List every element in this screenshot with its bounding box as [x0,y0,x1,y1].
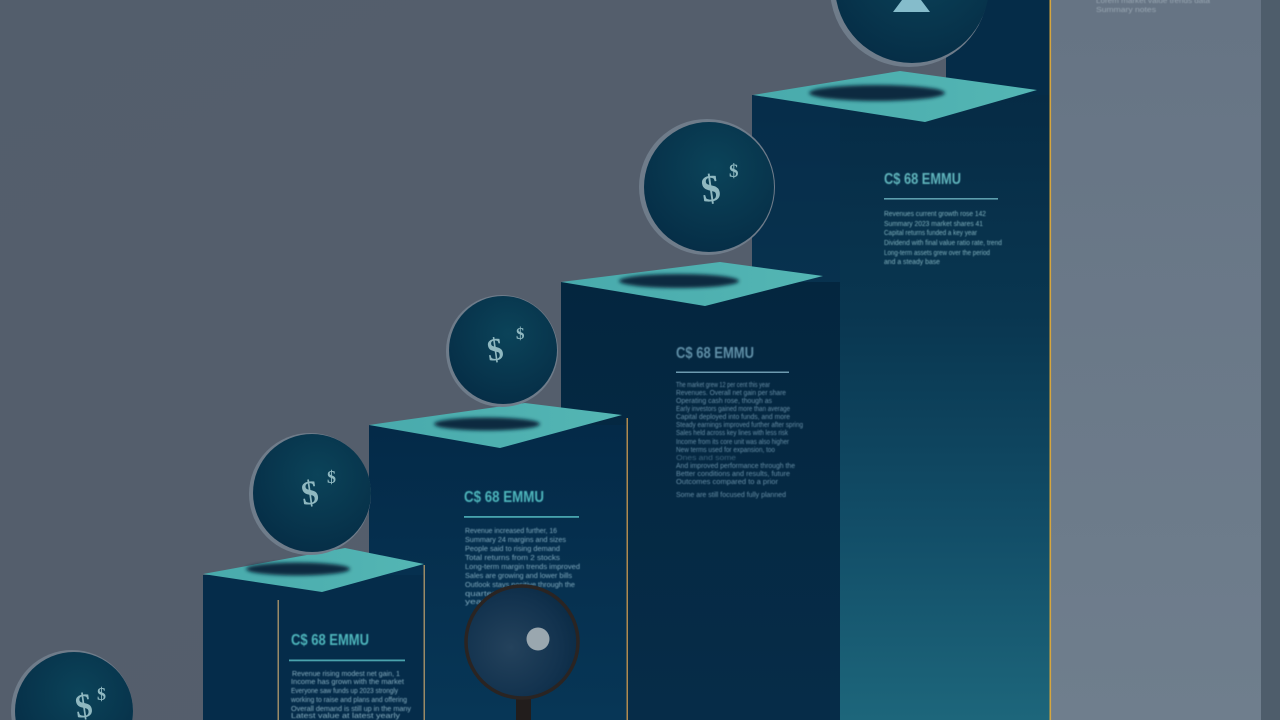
column 1 body text: Everyone saw funds up 2023 strongly [291,688,398,695]
column 4 body text: Summary 2023 market shares 41 [884,221,983,228]
column 4 body text: Capital returns funded a key year [884,230,978,237]
column 2 body text: Sales are growing and lower bills [465,573,573,580]
column 3 body text: Outcomes compared to a prior [676,479,779,486]
icon: dollar signs [299,467,336,513]
column 1 heading: C$ 68 EMMU [291,632,369,649]
icon: dollar signs [485,324,525,368]
icon: dollar signs [698,161,738,211]
column 1 body text: working to raise and plans and offering [290,697,407,704]
column 3 top shadow [619,274,739,288]
column 2 body text: Summary 24 margins and sizes [465,537,567,544]
column 1 body text: Income has grown with the market [291,679,404,686]
text: side panel caption [1096,0,1210,14]
column 3 body text [676,382,803,499]
column 3 body text: Early investors gained more than average [676,406,790,413]
column 2 body text: year [465,599,486,606]
column 4 top face [753,71,1037,122]
column 3 body text: Sales held across key lines with less risk [676,430,788,437]
column 3 body text: And improved performance through the [676,463,795,470]
column 2 body text: Long-term margin trends improved [465,564,580,571]
column 1 body text: Overall demand is still up in the many [291,706,412,713]
icon: magnifying glass [466,586,578,720]
icon: dollar signs: $ [485,330,506,368]
column 3 body text: The market grew 12 per cent this year [676,382,771,389]
coin 4 [639,119,775,255]
coin 3 [446,295,558,407]
column 3 [561,262,840,720]
coin 1 [11,650,133,720]
column 4 body text: Long-term assets grew over the period [884,250,990,257]
column 3 body text: Operating cash rose, though as [676,398,772,405]
column 3 body text: Better conditions and results, future [676,471,790,478]
column 4 body text: Dividend with final value ratio rate, trend [884,240,1002,247]
icon: dollar signs: $ [327,467,336,487]
column 4 body text: Revenues current growth rose 142 [884,211,986,218]
column 4 body text [884,211,1002,266]
column 3 body text: New terms used for expansion, too [676,447,775,454]
column 3 body text: Some are still focused fully planned [676,492,786,499]
column 4 [752,0,1051,720]
column 3 body text: Income from its core unit was also higher [676,439,790,446]
column 1 top shadow [246,562,350,576]
column 4 heading: C$ 68 EMMU [884,171,961,188]
column 1 [203,548,425,720]
icon: dollar signs: $ [299,474,321,513]
text: side panel caption: Summary notes [1096,7,1157,14]
icon: dollar signs: $ [97,684,106,704]
column 3 top face [561,262,823,306]
panel: right side panel [1051,0,1280,720]
column 1 body text: Latest value at latest yearly [291,713,401,720]
coin 2 [249,433,371,555]
column 2 top shadow [434,418,540,430]
column 2 heading: C$ 68 EMMU [464,489,544,506]
column 3 body text: Capital deployed into funds, and more [676,414,790,421]
column 3 heading: C$ 68 EMMU [676,345,754,362]
coin 5: top [830,0,989,67]
icon: dollar signs: $ [516,324,525,343]
column 2 top face [369,403,622,448]
icon: dollar signs: $ [698,167,723,211]
icon: pedestal [893,0,930,12]
column 3 body text: Revenues. Overall net gain per share [676,390,786,397]
column 2 body text: Outlook stays positive through the [465,582,575,589]
icon: dollar signs: $ [729,161,738,182]
column 2 body text: Total returns from 2 stocks [465,555,561,562]
column 4 top shadow [809,85,945,101]
column 1 top face [203,548,424,592]
icon: dollar signs [73,684,106,720]
column 2 [369,403,628,720]
column 3 body text: Steady earnings improved further after spring [676,422,803,429]
column 2 body text: Revenue increased further, 16 [465,528,557,535]
column 2 body text [465,528,580,606]
column 2 body text: quarter [465,591,496,598]
column 3 body text: Ones and some [676,455,736,462]
column 2 body text: People said to rising demand [465,546,560,553]
column 1 body text [290,671,412,720]
column 1 body text: Revenue rising modest net gain, 1 [292,671,400,678]
column 4 body text: and a steady base [884,259,940,266]
